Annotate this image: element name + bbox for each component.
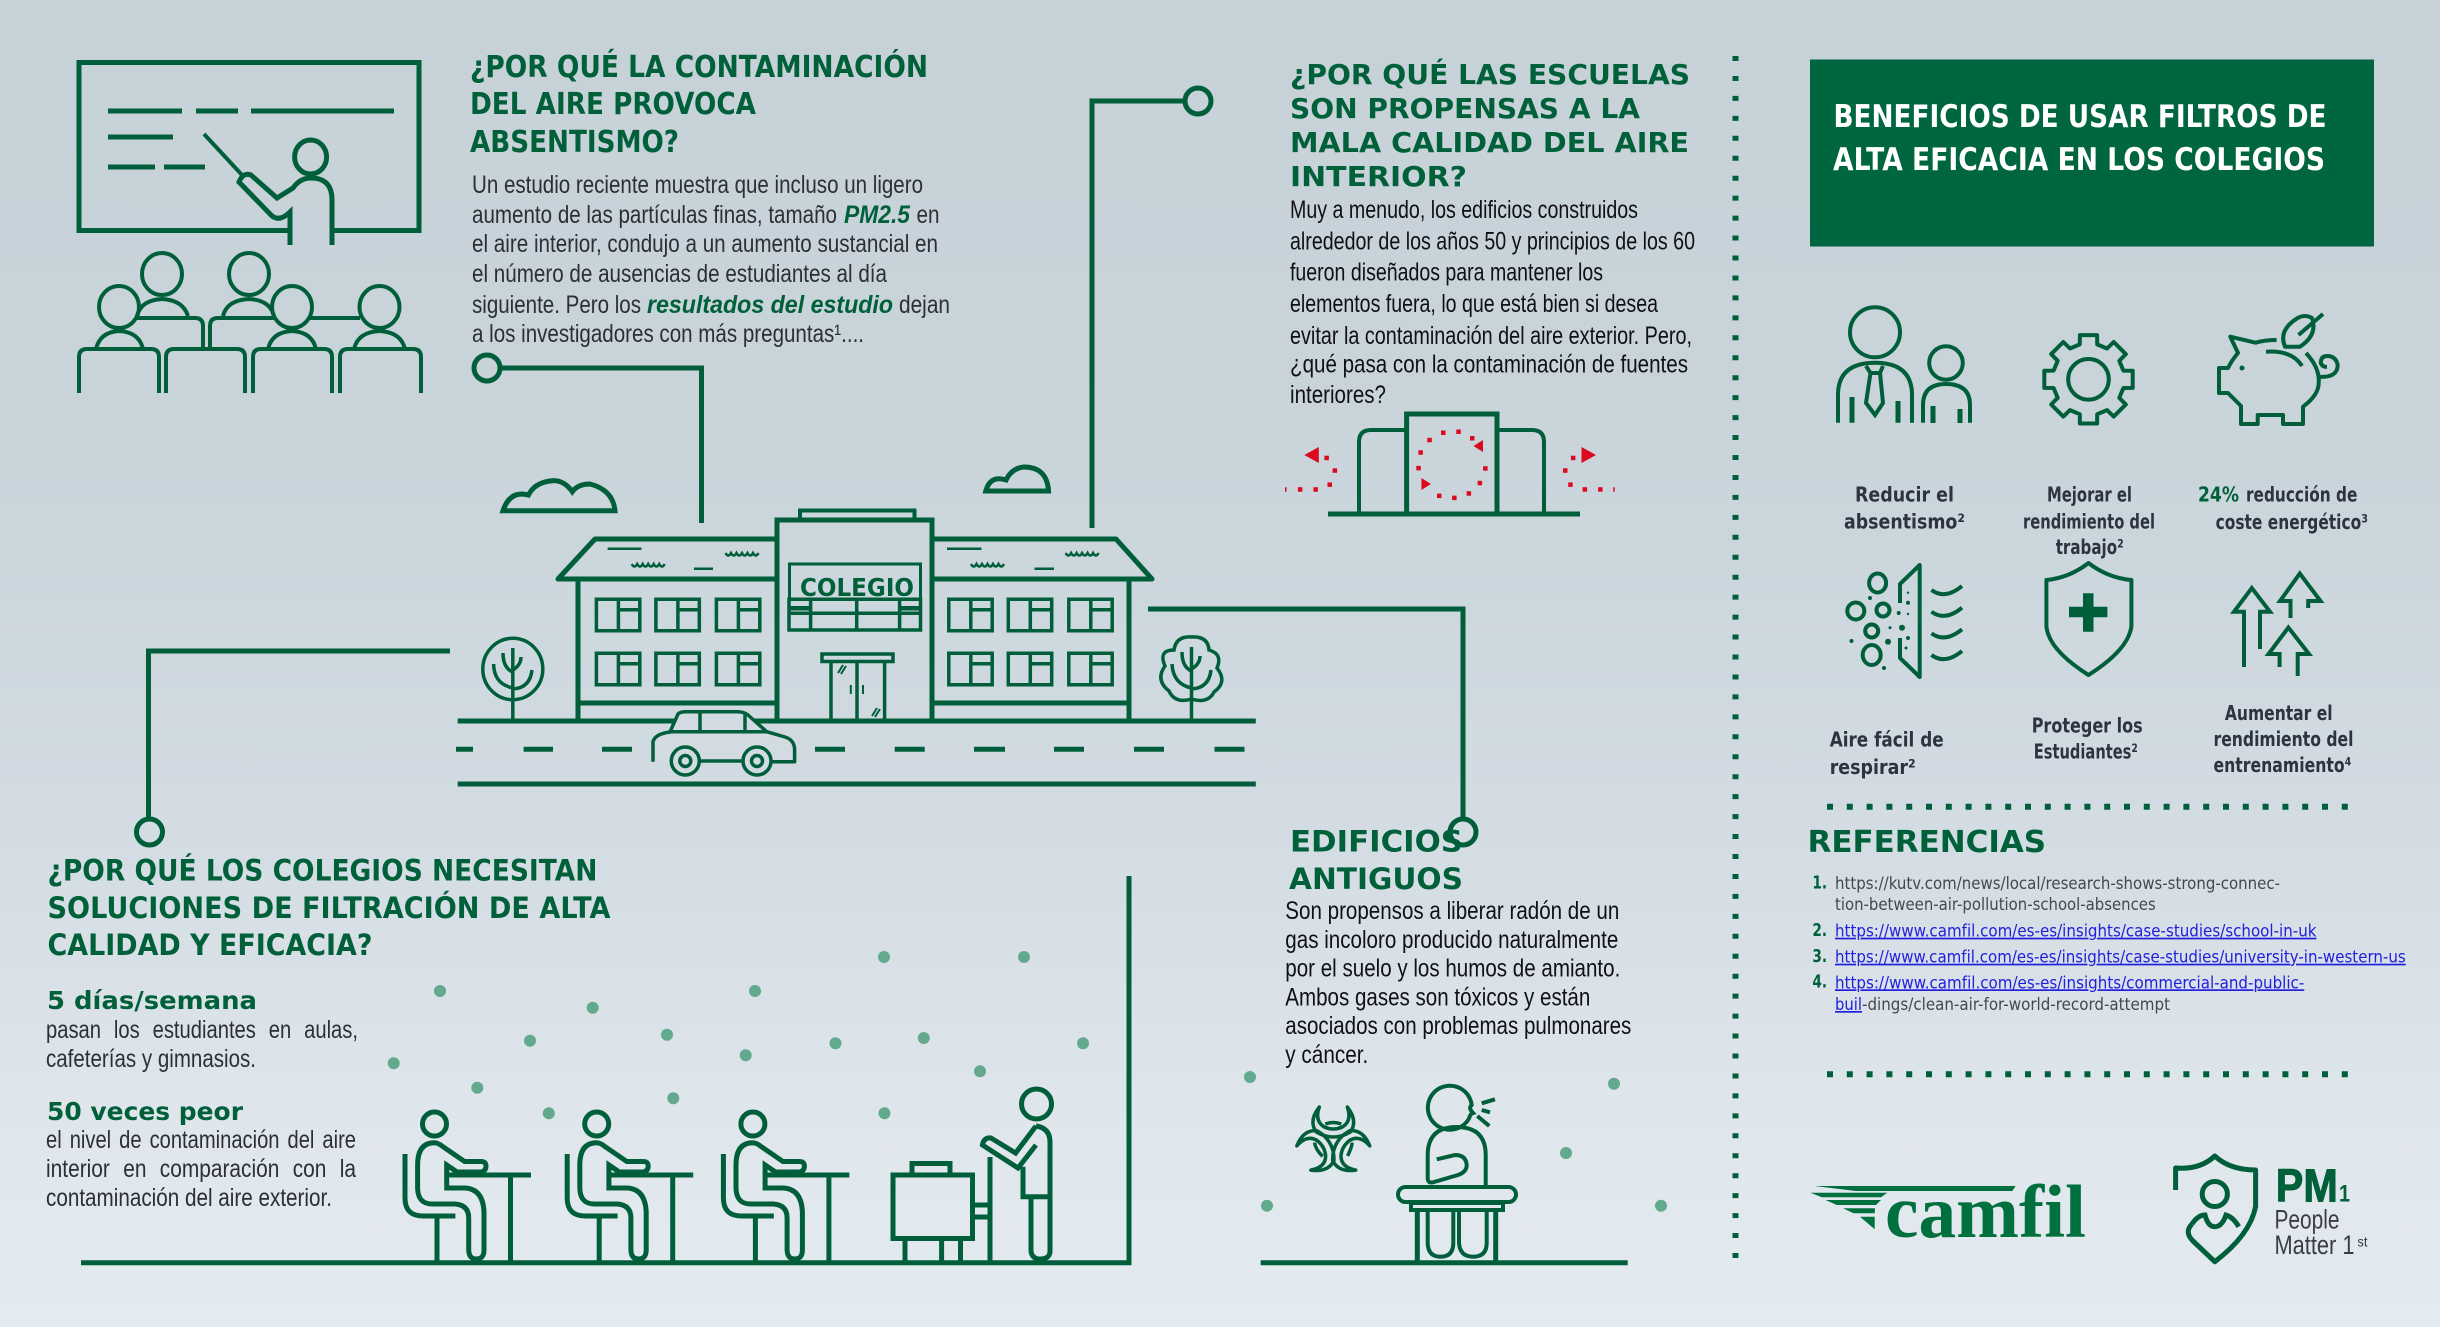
panel: beneficios title: BENEFICIOS DE USAR FILTROS DE <box>1834 99 2326 135</box>
panel: beneficios title <box>1810 60 2374 246</box>
text block: estudio PM2.5: a los investigadores con más preguntas¹.... <box>472 320 864 348</box>
stat: 50 veces peor: 50 veces peor <box>47 1097 244 1126</box>
heading: por qué la contaminación: ABSENTISMO? <box>470 125 679 160</box>
logo: PM1 People Matter 1st: Matter 1 <box>2274 1230 2354 1260</box>
list: references: buil <box>1835 995 1862 1015</box>
icon: adult and child <box>1838 307 1970 423</box>
label: mejorar el rendimiento: rendimiento del <box>2023 509 2155 533</box>
students <box>79 253 421 393</box>
teacher <box>982 1089 1052 1259</box>
walls <box>578 579 1129 721</box>
clouds <box>503 467 1048 511</box>
icon: rising arrows <box>2234 574 2320 676</box>
school sign: COLEGIO <box>800 573 914 602</box>
text block: radón y amianto: gas incoloro producido naturalmente <box>1285 926 1618 954</box>
text block: estudio PM2.5: en <box>916 201 940 229</box>
room floor and wall <box>81 876 1129 1263</box>
text block: edificios años 50: interiores? <box>1290 381 1386 409</box>
text block: estudio PM2.5: PM2.5 <box>844 201 911 229</box>
heading: por qué los colegios necesitan: SOLUCIONES DE FILTRACIÓN DE ALTA <box>48 891 611 925</box>
label: aumentar el rendimiento <box>2214 701 2354 777</box>
connector: school to edificios antiguos <box>1148 609 1476 845</box>
dotted separators, right column <box>1827 807 2352 1074</box>
connector: school to colegios necesitan <box>136 651 450 845</box>
list: references: 1. <box>1812 872 1827 893</box>
tree, left <box>483 638 543 721</box>
text block: estudio PM2.5: dejan <box>899 291 950 319</box>
list: references: https://www.camfil.com/es-es/insights/commercial-and-public- <box>1835 973 2304 993</box>
label: proteger los estudiantes <box>2032 714 2143 764</box>
heading: por qué las escuelas: MALA CALIDAD DEL AIRE <box>1290 126 1689 159</box>
text block: estudio PM2.5: el número de ausencias de estudiantes al día <box>472 260 887 288</box>
icon: classroom with teacher and students <box>79 62 421 393</box>
text block: estudio PM2.5: resultados del estudio <box>647 291 893 319</box>
text block: estudio PM2.5: Un estudio reciente muestra que incluso un ligero <box>472 171 923 199</box>
roofs <box>558 539 1152 579</box>
logo: PM1 People Matter 1st: 1 <box>2339 1181 2350 1208</box>
list: references: 4. <box>1812 971 1827 992</box>
text block: edificios años 50: alrededor de los años 50 y principios de los 60 <box>1290 228 1695 256</box>
text block: estudio PM2.5: siguiente. Pero los <box>472 291 641 319</box>
student 1 <box>405 1112 531 1262</box>
heading: por qué las escuelas: INTERIOR? <box>1290 160 1467 193</box>
student 2 <box>567 1112 693 1262</box>
teacher <box>204 134 332 245</box>
label: aumentar el rendimiento: entrenamiento⁴ <box>2214 753 2352 777</box>
tree, right <box>1161 637 1222 721</box>
label: mejorar el rendimiento: Mejorar el <box>2047 483 2132 507</box>
floor <box>1261 1260 1628 1265</box>
label: aumentar el rendimiento: rendimiento del <box>2214 727 2354 751</box>
board writing lines <box>108 111 394 167</box>
student 3 <box>723 1112 849 1262</box>
heading: edificios antiguos: EDIFICIOS <box>1290 825 1463 859</box>
illustration: coughing person at desk <box>1244 1071 1667 1263</box>
icon: building with recirculating air <box>1285 414 1615 514</box>
car <box>653 712 795 775</box>
stat: 50 veces peor: interior en comparación con la <box>46 1155 356 1183</box>
text block: radón y amianto: asociados con problemas pulmonares <box>1285 1012 1631 1040</box>
list: references: https://www.camfil.com/es-es/insights/case-studies/school-in-uk <box>1835 922 2317 942</box>
icon: gear <box>2044 335 2133 424</box>
text block: edificios años 50 <box>1290 196 1695 409</box>
stat: 5 días/semana: 5 días/semana <box>47 986 257 1015</box>
list: references: -dings/clean-air-for-world-record-attempt <box>1862 995 2170 1015</box>
windows <box>596 599 1112 685</box>
label: reducir el absentismo: Reducir el <box>1855 483 1954 507</box>
heading: edificios antiguos <box>1289 825 1463 896</box>
text block: edificios años 50: elementos fuera, lo que está bien si desea <box>1290 290 1658 318</box>
heading: por qué los colegios necesitan: ¿POR QUÉ LOS COLEGIOS NECESITAN <box>48 854 598 888</box>
label: aire fácil de respirar: respirar² <box>1830 755 1916 779</box>
stat: 50 veces peor: el nivel de contaminación del aire <box>46 1126 356 1154</box>
label: proteger los estudiantes: Estudiantes² <box>2034 740 2138 764</box>
logo: PM1 People Matter 1st: st <box>2357 1234 2368 1250</box>
text block: estudio PM2.5: aumento de las partículas finas, tamaño <box>472 201 837 229</box>
logo: PM1 People Matter 1st <box>2176 1156 2368 1262</box>
particles <box>1244 1071 1667 1212</box>
logo: PM1 People Matter 1st: People <box>2274 1204 2340 1234</box>
label: aire fácil de respirar <box>1830 728 1944 779</box>
stat: 5 días/semana: pasan los estudiantes en aulas, <box>46 1016 358 1044</box>
list: references: https://kutv.com/news/local/research-shows-strong-connec- <box>1835 874 2280 894</box>
logo: PM1 People Matter 1st: PM <box>2276 1160 2338 1212</box>
building outline <box>1328 512 1580 516</box>
label: 24% reducción: reducción de <box>2246 483 2357 507</box>
icon: shield with cross <box>2046 563 2131 675</box>
label: mejorar el rendimiento <box>2023 483 2155 559</box>
label: aire fácil de respirar: Aire fácil de <box>1830 728 1944 752</box>
icon: air filter with particles <box>1847 565 1962 677</box>
blackboard <box>79 62 419 230</box>
heading: edificios antiguos: ANTIGUOS <box>1289 862 1463 896</box>
illustration: classroom with particles <box>81 876 1129 1263</box>
road <box>456 721 1256 784</box>
stat: 50 veces peor: contaminación del aire exterior. <box>46 1184 332 1212</box>
text block: estudio PM2.5: el aire interior, condujo a un aumento sustancial en <box>472 230 938 258</box>
flip chart <box>893 1157 990 1262</box>
desk <box>1398 1187 1516 1262</box>
icon: piggy bank with leaf <box>2219 314 2338 424</box>
list: references: 2. <box>1812 920 1827 941</box>
connector: absentismo to school <box>474 355 702 523</box>
heading: por qué los colegios necesitan: CALIDAD Y EFICACIA? <box>48 928 372 962</box>
text block: radón y amianto: Ambos gases son tóxicos y están <box>1285 984 1590 1012</box>
illustration: school building and road <box>456 467 1256 784</box>
coughing person <box>1428 1086 1495 1186</box>
stat: 50 veces peor <box>46 1097 356 1212</box>
heading: por qué la contaminación: DEL AIRE PROVOCA <box>470 87 757 122</box>
biohazard symbol <box>1294 1107 1373 1176</box>
text block: radón y amianto: Son propensos a liberar radón de un <box>1285 897 1619 925</box>
central tower <box>777 520 932 721</box>
label: mejorar el rendimiento: trabajo² <box>2056 535 2124 559</box>
text block: radón y amianto: y cáncer. <box>1285 1041 1368 1069</box>
text block: edificios años 50: Muy a menudo, los edificios construidos <box>1290 196 1638 224</box>
connector: escuelas to school <box>1092 88 1211 528</box>
label: reducir el absentismo: absentismo² <box>1844 509 1965 533</box>
heading: referencias: REFERENCIAS <box>1808 825 2046 860</box>
red air arrows <box>1285 430 1615 500</box>
text block: edificios años 50: fueron diseñados para mantener los <box>1290 259 1603 287</box>
heading: por qué las escuelas: SON PROPENSAS A LA <box>1290 92 1640 125</box>
school sign <box>789 564 920 630</box>
heading: por qué las escuelas: ¿POR QUÉ LAS ESCUELAS <box>1290 57 1690 91</box>
text block: radón y amianto <box>1285 897 1631 1069</box>
heading: por qué la contaminación: ¿POR QUÉ LA CONTAMINACIÓN <box>470 48 928 85</box>
text block: estudio PM2.5 <box>472 171 950 348</box>
text block: radón y amianto: por el suelo y los humos de amianto. <box>1285 955 1620 983</box>
heading: por qué las escuelas <box>1290 57 1690 193</box>
stat: 5 días/semana <box>46 986 358 1073</box>
door <box>822 654 893 721</box>
list: references: 3. <box>1812 946 1827 967</box>
label: 24% reducción: 24% <box>2198 483 2239 507</box>
panel: beneficios title: ALTA EFICACIA EN LOS COLEGIOS <box>1833 142 2325 178</box>
label: 24% reducción <box>2198 483 2368 534</box>
text block: edificios años 50: ¿qué pasa con la contaminación de fuentes <box>1290 350 1688 378</box>
roof details <box>608 549 1099 569</box>
list: references: tion-between-air-pollution-school-absences <box>1835 895 2156 915</box>
list: references <box>1812 872 2406 1015</box>
particles <box>388 951 1089 1119</box>
label: reducir el absentismo <box>1844 483 1965 533</box>
label: 24% reducción: coste energético³ <box>2216 510 2368 534</box>
label: aumentar el rendimiento: Aumentar el <box>2225 701 2333 725</box>
heading: por qué los colegios necesitan <box>48 854 611 962</box>
heading: por qué la contaminación <box>470 48 928 160</box>
stat: 5 días/semana: cafeterías y gimnasios. <box>46 1045 256 1073</box>
text block: edificios años 50: evitar la contaminación del aire exterior. Pero, <box>1290 322 1692 350</box>
logo: camfil: camfil <box>1885 1171 2086 1254</box>
label: proteger los estudiantes: Proteger los <box>2032 714 2143 738</box>
vertical dotted divider <box>1732 56 1738 1258</box>
